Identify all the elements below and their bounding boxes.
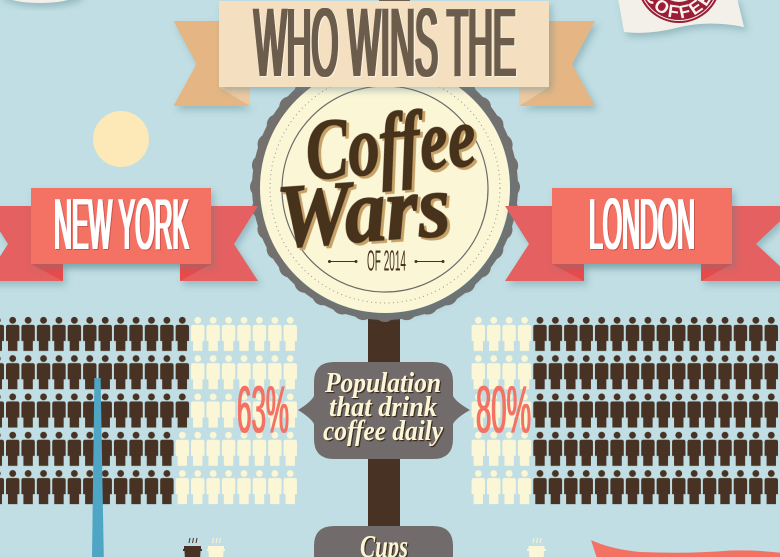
badge inner ring [282, 86, 488, 292]
ribbon: London [505, 184, 780, 281]
ribbon: New York [0, 184, 258, 281]
heading: Coffee: Coffee [302, 88, 479, 198]
icon: dark coffee cup, New York [183, 538, 202, 557]
subheading: of 2014: OF 2014 [367, 246, 406, 278]
pictogram: New York drinkers [0, 316, 298, 508]
callout: population that drink coffee daily: Population [324, 368, 441, 399]
title banner tails [174, 21, 595, 106]
callout: population that drink coffee daily: that drink [329, 392, 437, 423]
title banner [174, 0, 595, 106]
text: 80% [476, 372, 531, 448]
text: 63% [237, 372, 289, 448]
callout: population that drink coffee daily [298, 362, 470, 459]
pictogram: London drinkers [471, 316, 780, 508]
callout: population that drink coffee daily: coffee daily [323, 416, 444, 447]
badge face [260, 63, 510, 313]
heading: Wars: Wars [274, 156, 453, 267]
sun [93, 111, 149, 167]
ribbon: bottom right banner [591, 540, 780, 557]
title banner front [219, 1, 549, 87]
badge dotted ring [270, 73, 500, 303]
subheading: of 2014 [328, 246, 444, 278]
badge scalloped edge [252, 54, 518, 320]
icon: cream coffee cup, New York [207, 538, 225, 557]
top stem [379, 0, 410, 4]
icon: cream coffee cup, London [527, 538, 546, 557]
top-left plate edge [0, 0, 82, 3]
flag: coffee brand logo [618, 0, 748, 40]
badge: coffee wars [252, 54, 518, 320]
callout: cups [314, 526, 453, 557]
ribbon: New York: NEW YORK [54, 184, 189, 265]
tower: New York skyline spire [92, 378, 104, 557]
pole [368, 300, 400, 540]
